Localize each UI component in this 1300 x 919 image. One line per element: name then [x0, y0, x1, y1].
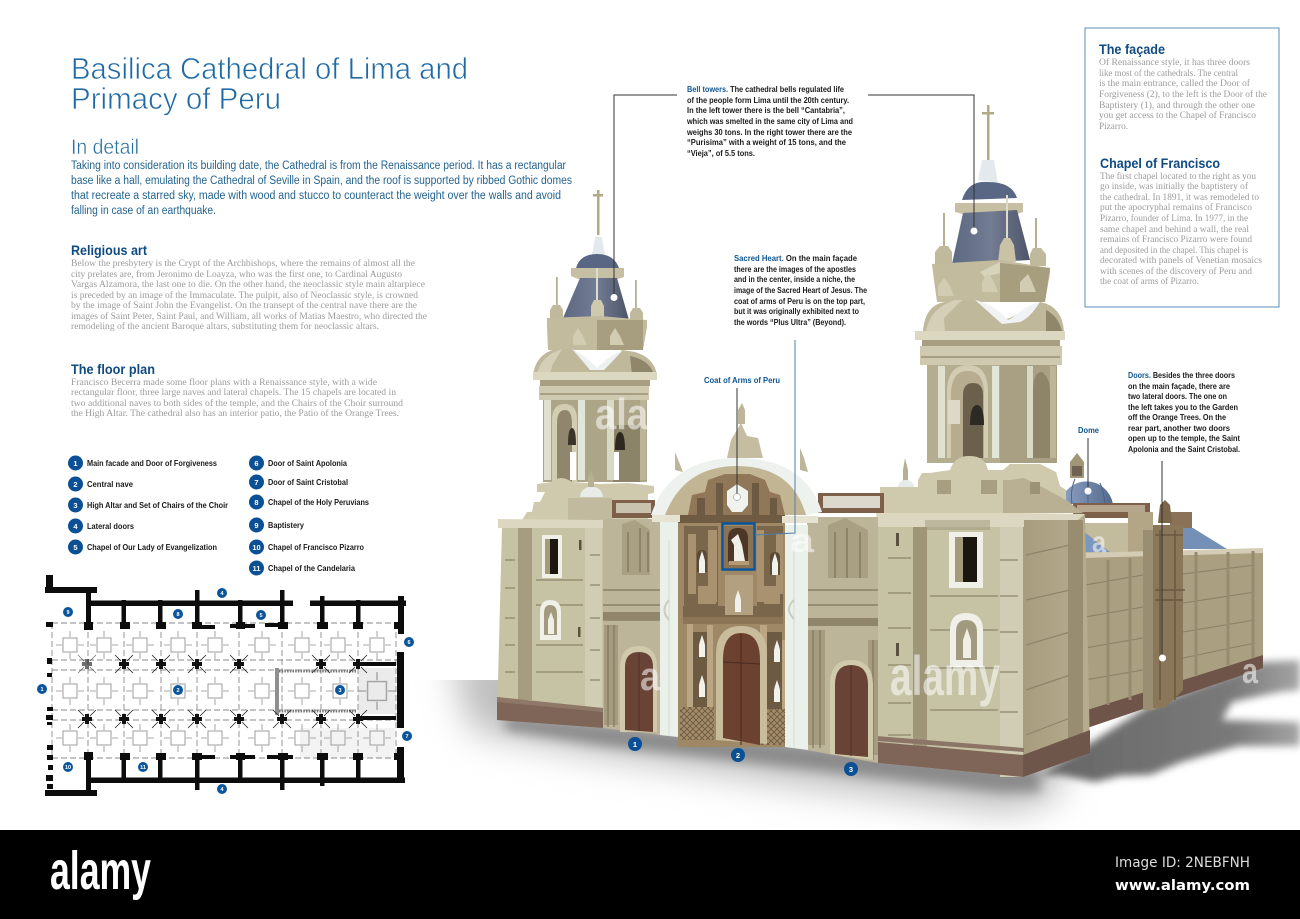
legend: floor plan key: High Altar and Set of Chairs of the Choir — [87, 501, 228, 510]
callout: doors: the left takes you to the Garden — [1128, 403, 1238, 412]
legend: floor plan key: 3 — [73, 501, 78, 510]
floor plan: 3 — [338, 688, 342, 694]
legend: floor plan key: 5 — [73, 543, 78, 552]
callout: coat of arms of Peru: Coat of Arms of Peru — [704, 376, 780, 385]
portal upper ornaments — [683, 526, 783, 617]
building number markers: 3 — [849, 765, 853, 774]
text block: chapel of Francisco: decorated with panels of Venetian mosaics — [1100, 255, 1262, 266]
callout: sacred heart: the words “Plus Ultra” (Beyond). — [734, 318, 846, 327]
watermark fragments: a — [1242, 650, 1259, 691]
floor plan: 9 — [66, 610, 70, 616]
text block: the floor plan: Francisco Becerra made some floor plans with a Renaissance style, with a wide — [71, 377, 377, 388]
text block: chapel of Francisco: The first chapel located to the right as you — [1100, 171, 1256, 182]
text block: in detail: base like a hall, emulating the Cathedral of Seville in Spain, and the roof is supported by ribbed Gothic domes — [71, 175, 572, 187]
legend: floor plan key: Main facade and Door of Forgiveness — [87, 459, 218, 468]
text block: the floor plan: rectangular floor, three large naves and lateral chapels. The 15 chapels are located in — [71, 387, 396, 398]
floor plan: 6 — [407, 640, 411, 646]
legend: floor plan key: Central nave — [87, 480, 134, 489]
left tower spire — [550, 190, 643, 321]
floor plan: 7 — [405, 734, 409, 740]
floor plan: 11 — [140, 765, 146, 771]
central door — [723, 633, 760, 745]
legend: floor plan key: 9 — [254, 521, 259, 530]
watermark fragments: ala — [595, 390, 648, 439]
floor plan: 2 — [176, 688, 180, 694]
text block: the facade: Forgiveness (2), to the left is the Door of the — [1099, 89, 1267, 100]
text block: in detail — [71, 160, 572, 217]
text block: the floor plan — [71, 377, 403, 419]
callout: doors — [1128, 371, 1240, 662]
legend: floor plan key: Lateral doors — [87, 522, 135, 531]
white pilasters — [652, 515, 818, 750]
title — [71, 51, 468, 116]
callout: doors: two lateral doors. The one on — [1128, 392, 1227, 401]
building number markers: 2 — [736, 751, 740, 760]
title: Primacy of Peru — [71, 81, 281, 116]
text block: chapel of Francisco — [1100, 171, 1262, 287]
callout: doors: rear part, another two doors — [1128, 424, 1231, 433]
callout: sacred heart: image of the Sacred Heart of Jesus. The — [734, 286, 867, 295]
text block: the facade: Baptistery (1), and through the other one — [1099, 100, 1255, 111]
footer image id: Image ID: 2NEBFNH — [1115, 855, 1250, 871]
legend: floor plan key: 8 — [254, 498, 259, 507]
callout: doors: Doors. Besides the three doors — [1128, 371, 1235, 380]
text block: religious art: is preceded by an image of the Immaculate. The pulpit, also of Neoclassic style, is crowned — [71, 290, 418, 301]
text block: in detail: Taking into consideration its building date, the Cathedral is from the Renaissance period. It has a rectangular — [71, 160, 566, 172]
watermark fragments: a — [790, 522, 815, 560]
text block: the facade: Of Renaissance style, it has three doors — [1099, 57, 1250, 68]
legend: floor plan key: 4 — [73, 522, 78, 531]
text block: chapel of Francisco: Pizarro, founder of Lima. In 1977, in the — [1100, 213, 1248, 224]
legend: floor plan key: Chapel of the Holy Peruvians — [268, 498, 370, 507]
text block: the floor plan: two additional naves to both sides of the temple, and the Chairs of the Choir surround — [71, 398, 403, 409]
callout: sacred heart: Sacred Heart. On the main façade — [734, 254, 858, 263]
tower cross and spire — [935, 105, 1046, 266]
legend: floor plan key — [68, 456, 370, 576]
callout: bell towers: “Purisima” with a weight of 15 tons, and the — [687, 138, 847, 147]
text block: chapel of Francisco: put the apocryphal remains of Francisco — [1100, 202, 1252, 213]
callout: doors: open up to the temple, the Saint — [1128, 434, 1240, 443]
text block: the facade: Pizarro. — [1099, 122, 1128, 132]
callout: bell towers: which was smelted in the same city of Lima and — [686, 117, 853, 126]
legend: floor plan key: 1 — [73, 459, 78, 468]
portal lower columns — [687, 622, 785, 710]
callout: sacred heart: coat of arms of Peru is on the top part, — [734, 297, 865, 306]
callout: bell towers: “Vieja”, of 5.5 tons. — [687, 149, 755, 158]
tower side wall — [1023, 515, 1090, 777]
callout: doors: off the Orange Trees. On the — [1128, 413, 1226, 422]
text block: religious art: remodeling of the ancient Baroque altars, substituting them for neoclassic altars. — [71, 321, 379, 332]
callout: bell towers — [610, 85, 978, 301]
callout: dome — [1078, 426, 1100, 494]
title: Basilica Cathedral of Lima and — [71, 51, 468, 86]
building: Lima cathedral — [497, 105, 1263, 777]
text block: religious art: city prelates are, from Jeronimo de Loayza, who was the first one, to Cardinal Augusto — [71, 269, 402, 280]
watermark fragments — [595, 390, 1259, 707]
statues — [699, 551, 780, 702]
floor plan: 4 — [220, 591, 224, 597]
text block: the facade: is the main entrance, called the Door of — [1099, 78, 1251, 89]
heading: religious art: Religious art — [71, 242, 147, 258]
text block: chapel of Francisco: same chapel and behind a wall, the real — [1100, 225, 1249, 235]
text block: chapel of Francisco: and deposited in the chapel. This chapel is — [1100, 246, 1248, 256]
legend: floor plan key: 6 — [254, 459, 259, 468]
callout: doors: Apolonia and the Saint Cristobal. — [1128, 445, 1240, 454]
floor plan: 5 — [259, 613, 263, 619]
legend: floor plan key: Chapel of the Candelaria — [268, 564, 356, 573]
callout: doors: on the main façade, there are — [1128, 382, 1231, 391]
footer url: www.alamy.com — [1115, 878, 1250, 894]
heading: the facade: The façade — [1099, 41, 1165, 57]
central gable — [651, 403, 822, 515]
footer logo: alamy — [50, 841, 151, 901]
legend: floor plan key: Chapel of Our Lady of Evangelization — [87, 543, 217, 552]
callout: coat of arms of Peru — [704, 376, 780, 500]
callout: sacred heart: and in the center, inside a niche, the — [734, 275, 855, 284]
text block: religious art — [71, 258, 427, 332]
callout: sacred heart: there are the images of the apostles — [734, 265, 856, 274]
legend: floor plan key: 2 — [73, 480, 78, 489]
floor plan: 1 — [40, 687, 44, 693]
text block: chapel of Francisco: remains of Francisco Pizarro were found — [1100, 234, 1252, 245]
text block: the facade — [1099, 57, 1267, 132]
legend: floor plan key: Baptistery — [268, 521, 305, 530]
central portal — [678, 515, 785, 747]
floor plan: 10 — [65, 765, 71, 771]
text block: religious art: by the image of Saint John the Evangelist. On the transept of the central nave there are the — [71, 300, 417, 311]
facade walls — [603, 493, 884, 763]
watermark fragments: a — [1092, 526, 1106, 559]
callout: sacred heart — [734, 254, 867, 535]
text block: the facade: you get access to the Chapel of Francisco — [1099, 110, 1256, 121]
text block: religious art: Below the presbytery is the Crypt of the Archbishops, where the remains of almost all the — [71, 258, 415, 269]
legend: floor plan key: 11 — [253, 564, 260, 573]
callout: bell towers: In the left tower there is the bell “Cantabria”, — [687, 106, 845, 115]
text block: religious art: Vargas Alzamora, the last one to die. On the other hand, the neoclassic style main altarpiece — [71, 280, 425, 290]
legend: floor plan key: Chapel of Francisco Pizarro — [268, 543, 364, 552]
legend: floor plan key: Door of Saint Apolonia — [268, 459, 348, 468]
text block: religious art: images of Saint Peter, Saint Paul, and William, all works of Matias Maestro, who directed the — [71, 311, 427, 322]
callout: bell towers: weighs 30 tons. In the right tower there are the — [686, 128, 853, 137]
rear wing — [1073, 500, 1263, 728]
left tower belfry — [522, 316, 657, 520]
floor plan: 8 — [176, 612, 180, 618]
balustrades — [612, 493, 884, 518]
sacred heart niche — [722, 524, 754, 570]
text block: chapel of Francisco: the cathedral. In 1891, it was remodeled to — [1100, 193, 1259, 203]
callout: bell towers: Bell towers. The cathedral bells regulated life — [687, 85, 845, 94]
footer bar — [0, 830, 1300, 919]
building number markers — [628, 737, 858, 776]
callout: dome: Dome — [1078, 426, 1100, 435]
ground shadow — [450, 650, 1300, 812]
text block: chapel of Francisco: go inside, was initially the baptistery of — [1100, 181, 1249, 192]
right tower — [876, 105, 1090, 777]
callout: sacred heart: but it was originally exhibited next to — [734, 307, 859, 316]
building number markers: 1 — [633, 740, 637, 749]
legend: floor plan key: Door of Saint Cristobal — [268, 478, 348, 487]
text block: the facade: like most of the cathedrals. The central — [1099, 68, 1238, 79]
watermark fragments: alamy — [890, 644, 1000, 707]
text block: chapel of Francisco: with scenes of the discovery of Peru and — [1100, 266, 1252, 277]
legend: floor plan key: 10 — [252, 543, 261, 552]
panel: facade and chapel — [1085, 28, 1279, 307]
watermark fragments: a — [640, 655, 661, 699]
floor plan — [37, 575, 414, 796]
floor plan: 4 — [220, 787, 224, 793]
text block: in detail: that recreate a starred sky, made with wood and stucco to counteract the weight over the walls and avoid — [71, 190, 561, 202]
left tower wall — [497, 527, 603, 728]
right door — [830, 660, 873, 760]
callout: bell towers: of the people form Lima until the 20th century. — [687, 96, 849, 105]
text block: in detail: falling in case of an earthquake. — [71, 205, 216, 217]
text block: chapel of Francisco: the coat of arms of Pizarro. — [1100, 276, 1199, 287]
heading: chapel of Francisco: Chapel of Francisco — [1100, 155, 1220, 171]
left door — [620, 646, 657, 732]
heading: the floor plan: The floor plan — [71, 361, 155, 377]
legend: floor plan key: 7 — [254, 478, 259, 487]
tower belfry — [915, 260, 1083, 513]
tower front wall — [878, 527, 1023, 777]
heading: in detail: In detail — [71, 136, 139, 159]
left tower — [497, 190, 657, 728]
text block: the floor plan: the High Altar. The cathedral also has an interior patio, the Patio of the Orange Trees. — [71, 408, 399, 419]
rear dome — [1060, 453, 1113, 504]
